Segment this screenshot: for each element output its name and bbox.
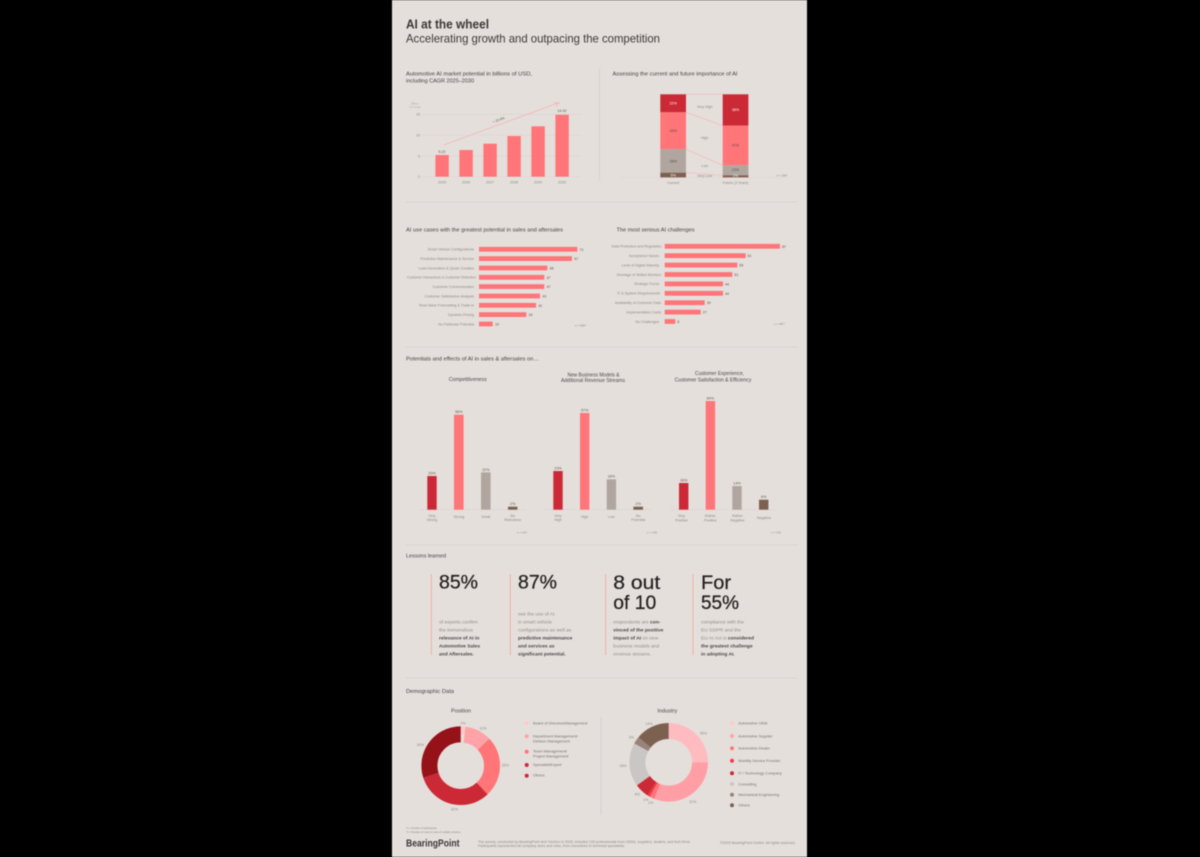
category labels: Low [608, 515, 615, 519]
category labels: Strong [427, 518, 437, 522]
sample size: n = 132 [771, 530, 781, 534]
donut value labels: 31% [689, 800, 697, 804]
heading: market potential [406, 72, 532, 84]
stat: 8 out of 10 [606, 572, 664, 657]
stat: 85 percent [431, 572, 480, 657]
stacked bar: current: 22% [670, 102, 678, 106]
values: 2% [636, 502, 642, 506]
legend: industry: Automotive OEM [738, 722, 767, 726]
legend: position: Department Management/ [533, 735, 579, 739]
row labels [612, 245, 662, 324]
chart title [561, 373, 625, 384]
stacked bar: future [723, 94, 748, 178]
legend: industry: Mobility Service Provider [738, 759, 781, 763]
values: 22% [482, 468, 490, 472]
category labels between bars [697, 105, 712, 178]
stat: 87 percent: see the use of AI [518, 611, 554, 617]
stat: for 55 percent: For [701, 572, 732, 594]
donut value labels: 18% [619, 764, 627, 768]
y axis labels [416, 112, 420, 179]
axis labels [667, 181, 748, 185]
bars [479, 247, 577, 326]
values: 14% [733, 481, 741, 485]
values: 47 [546, 276, 551, 280]
values: 44 [542, 294, 546, 298]
values: 27 [703, 311, 707, 315]
category labels: Rather [732, 514, 744, 518]
category labels: High [581, 515, 588, 519]
chart: customer experience [670, 371, 781, 534]
heading: potentials and effects: Potentials and effects of AI in sales & aftersales on… [406, 356, 539, 362]
stat: for 55 percent [693, 572, 754, 657]
panel: industry donut [619, 709, 782, 808]
bars [679, 401, 768, 510]
chart title: Additional Revenue Streams [561, 378, 625, 384]
values: 18% [608, 475, 616, 479]
footnotes: *n = Number of participants [406, 827, 437, 830]
row labels: Customer Satisfaction Analysis [425, 294, 474, 298]
legend: position: Team Management/ [533, 750, 568, 754]
stat: 8 out of 10: of 10 [613, 592, 656, 614]
stat: 87 percent [510, 572, 573, 657]
donut value labels: 32% [451, 808, 459, 812]
stat: 87 percent: configurations as well as [518, 627, 572, 633]
heading: market potential: including CAGR 2025–2030 [406, 78, 474, 84]
chart title: New Business Models & [568, 373, 620, 379]
y axis labels: 0 [418, 175, 420, 179]
donut value labels: 3% [629, 736, 635, 740]
heading: challenges: The most serious AI challenges [616, 228, 695, 234]
values: 10 [495, 322, 499, 326]
chart title: Customer Satisfaction & Efficiency [675, 377, 752, 383]
donut value labels [417, 721, 510, 812]
year labels: 2025 [438, 180, 446, 184]
category labels: Strong [454, 515, 464, 519]
values: 34 [528, 313, 533, 317]
row labels: Implementation Costs [626, 310, 661, 314]
stat: 87 percent: 87% [518, 572, 557, 594]
year labels: 2030 [558, 180, 566, 184]
donut value labels: 6% [635, 793, 641, 797]
stat: 85 percent: of experts confirm [439, 619, 478, 625]
values: 44 [725, 292, 729, 296]
panel: position donut [417, 709, 588, 812]
sample size: n = 139 [647, 530, 657, 534]
chart title: Customer Experience, [695, 371, 744, 377]
row labels: Customer Communication [432, 285, 474, 289]
axis labels: Future (3 Years) [723, 181, 748, 185]
legend: position: Board of Directors/Management [533, 721, 588, 725]
year labels: 2026 [462, 180, 470, 184]
row labels: No Challenges [635, 320, 659, 324]
year labels: 2029 [534, 180, 542, 184]
donut value labels: 14% [645, 722, 653, 726]
stat: for 55 percent: in adopting AI. [701, 651, 735, 657]
stat: 85 percent: Automotive Sales [439, 643, 480, 649]
stat: 87 percent: predictive maintenance [518, 635, 573, 641]
row labels: No Particular Potential [438, 322, 474, 326]
row labels: Availability of Customer Data [615, 301, 661, 305]
category labels: Very [428, 514, 436, 518]
category labels [427, 514, 521, 522]
category labels between bars: Very Low [697, 174, 712, 178]
category labels: Small [481, 515, 490, 519]
stat: for 55 percent: the greatest challenge [701, 643, 753, 649]
copyright: ©2025 BearingPoint GmbH. All rights reserved. [720, 841, 796, 845]
values: 41 [538, 304, 542, 308]
axis unit label: Billion [411, 102, 419, 106]
panel: AI use cases horizontal bars [406, 228, 587, 328]
bar value labels [438, 109, 567, 154]
stacked bar: current: 44% [670, 129, 678, 133]
row labels: Customer Interactions & Customer Retention [407, 276, 476, 280]
values: 56% [455, 410, 463, 414]
stat: 87 percent: significant potential. [518, 651, 566, 657]
chart: competitiveness [419, 377, 527, 534]
values: 8 [677, 320, 679, 324]
survey description: The survey, conducted by BearingPoint and YouGov in 2025, included 139 professionals from OEMs, suppliers, dealers, and tech firms. [478, 840, 691, 844]
row labels: Data Protection and Regulation [612, 245, 662, 249]
legend: industry: Automotive Dealer [738, 747, 771, 751]
y axis labels: 5 [418, 154, 420, 158]
connector lines between bars [686, 94, 723, 175]
footnotes [406, 827, 461, 834]
donut value labels: 2% [460, 721, 466, 725]
bar value labels: 14.92 [557, 109, 567, 113]
legend: industry: Others [738, 804, 750, 808]
values: 16% [680, 478, 688, 482]
legend: industry [730, 721, 782, 808]
category labels: Very [678, 514, 685, 518]
heading: lessons learned: Lessons learned [406, 554, 446, 560]
panel: AI challenges horizontal bars [612, 228, 786, 326]
axis unit label: US Dollar [409, 105, 421, 109]
chart title: Competitiveness [449, 377, 487, 383]
values [680, 396, 767, 499]
legend: position: Division Management [533, 739, 571, 743]
stat: for 55 percent: 55% [701, 592, 739, 614]
category labels [554, 514, 645, 522]
bars [665, 244, 780, 324]
sample size: n = 197 [517, 530, 527, 534]
values: 57% [581, 408, 589, 412]
stat: 8 out of 10: impact of AI on new [613, 635, 659, 641]
donut value labels: 30% [417, 743, 425, 747]
row labels: Level of Digital Maturity [622, 263, 659, 267]
heading: importance: Assessing the current and future importance of AI [612, 72, 738, 78]
legend: industry: Mechanical Engineering [738, 793, 779, 797]
legend: industry: IT / Technology Company [738, 772, 782, 776]
values: 55 [739, 264, 743, 268]
stat: 8 out of 10: revenue streams. [613, 651, 651, 657]
footnotes: *n = Number of votes in case of multiple answers [406, 831, 461, 834]
stacked bar: current: 5% [671, 174, 677, 178]
values: 47 [546, 285, 551, 289]
heading: demographic data: Demographic Data [406, 689, 454, 695]
survey description [478, 840, 691, 848]
title [406, 16, 660, 46]
year labels: 2027 [486, 180, 494, 184]
year labels [438, 180, 566, 184]
donut value labels: 11% [480, 727, 487, 731]
row labels: Smart Vehicle Configurations [428, 248, 474, 252]
legend: industry: Consulting [738, 782, 756, 786]
values: 48 [550, 266, 554, 270]
bars [553, 413, 643, 510]
stat: 87 percent: in smart vehicle [518, 619, 552, 625]
donut: position [429, 734, 492, 797]
row labels: Predictive Maintenance & Service [420, 257, 474, 261]
stacked bar: current: 28% [670, 160, 678, 164]
values: 64% [707, 396, 715, 400]
stat: 85 percent: relevance of AI in [439, 635, 479, 641]
heading: market potential: Automotive AI market potential in billions of USD, [406, 72, 532, 78]
category labels: Rather [705, 514, 716, 518]
page background panel [392, 0, 807, 857]
row labels: Real-Value Forecasting & Trade-in [419, 304, 474, 308]
stat: 85 percent: and Aftersales. [439, 651, 475, 657]
category labels [675, 514, 771, 522]
row labels [407, 248, 476, 326]
panel: market potential bar chart [406, 72, 582, 184]
bar value labels: 5.22 [438, 150, 446, 154]
donut value labels: 25% [502, 763, 510, 767]
row labels: IT & System Requirements [617, 292, 660, 296]
values: 71 [580, 248, 584, 252]
values [428, 410, 516, 506]
values: 30 [707, 301, 711, 305]
category labels: No [510, 514, 515, 518]
stat: 87 percent: and services as [518, 643, 555, 649]
donut value labels: 2% [648, 801, 654, 805]
sample size: n = 487* [774, 322, 786, 326]
legend: position [525, 721, 588, 778]
category labels between bars: High [701, 136, 708, 140]
arrow: CAGR growth [444, 103, 559, 145]
category labels: No [636, 514, 641, 518]
values: 67 [574, 257, 578, 261]
stat: 8 out of 10: business models and [613, 643, 660, 649]
values: 20% [428, 472, 436, 476]
category labels between bars: Very High [697, 105, 712, 109]
legend: position: Others [533, 774, 545, 778]
values [495, 248, 584, 326]
values: 61 [748, 254, 752, 258]
values: 6% [761, 495, 767, 499]
row labels: Shortage of Skilled Workers [617, 273, 661, 277]
category labels: High [554, 518, 562, 522]
legend: industry: Automotive Supplier [738, 734, 773, 738]
values [677, 245, 786, 324]
panel: current and future importance stacked bars [612, 72, 788, 185]
donut: industry [637, 731, 700, 794]
stat: 8 out of 10: respondents are con- [613, 619, 661, 625]
bars 2025-2030 [435, 115, 569, 177]
sample size: n = 158* [776, 174, 788, 178]
stacked bar: future: 2% [733, 174, 739, 178]
year labels: 2028 [510, 180, 518, 184]
category labels: Relevance [504, 518, 521, 522]
chart title: Position [451, 709, 471, 715]
axis unit label [409, 102, 421, 109]
values [554, 408, 642, 506]
donut value labels: 25% [700, 732, 708, 736]
values: 51 [734, 273, 738, 277]
category labels: Positive [675, 518, 688, 522]
category labels: Positive [704, 518, 717, 522]
chart title [675, 371, 752, 383]
legend: position: Specialist/Expert [533, 763, 563, 767]
stacked bar: current [660, 94, 686, 178]
row labels: Lead Generation & Quote Creation [418, 266, 474, 270]
stacked bar: future: 38% [732, 108, 740, 112]
stat: for 55 percent: compliance with the [701, 619, 744, 625]
axis labels: Current [667, 181, 679, 185]
row labels: Dynamic Pricing [448, 313, 474, 317]
donut value labels [619, 722, 708, 805]
stat: 85 percent: the tremendous [439, 627, 474, 633]
chart title: Industry [657, 709, 677, 715]
chart: new business models [545, 373, 657, 534]
category labels: Negative [757, 516, 771, 520]
donut value labels: 1% [643, 798, 649, 802]
values: 23% [554, 466, 562, 470]
row labels: Strategic Focus [634, 282, 659, 286]
stat: 8 out of 10: 8 out [613, 572, 661, 594]
stat: 8 out of 10: vinced of the positive [613, 627, 664, 633]
stat: 85 percent: 85% [439, 572, 478, 594]
values: 87 [782, 245, 786, 249]
sample size: n = 696* [575, 324, 587, 328]
stat: for 55 percent: EU GDPR and the [701, 627, 741, 633]
stacked bar: future: 47% [732, 144, 740, 148]
values: 44 [725, 282, 729, 286]
logo: BearingPoint: BearingPoint [406, 838, 460, 850]
category labels between bars: Low [701, 164, 708, 168]
stat: for 55 percent: EU AI Act is considered [701, 635, 754, 641]
values: 2% [510, 502, 516, 506]
category labels: Potential [631, 518, 645, 522]
legend: position: Project Management [533, 754, 569, 758]
category labels: Negative [730, 518, 745, 522]
y axis labels: 10 [416, 134, 420, 138]
survey description: Participants represented all company sizes and roles, from executives to technical specialists. [478, 844, 625, 848]
title: Accelerating growth and outpacing the competition [406, 32, 660, 46]
category labels: Very [554, 514, 562, 518]
CAGR label: + 23.6% [492, 116, 505, 124]
title: AI at the wheel [406, 16, 489, 32]
heading: use cases: AI use cases with the greatest potential in sales and aftersales [406, 228, 563, 234]
stacked bar: future: 13% [732, 168, 740, 172]
row labels: Acceptance Issues [629, 254, 659, 258]
bars [427, 415, 517, 510]
y axis labels: 15 [416, 112, 420, 116]
